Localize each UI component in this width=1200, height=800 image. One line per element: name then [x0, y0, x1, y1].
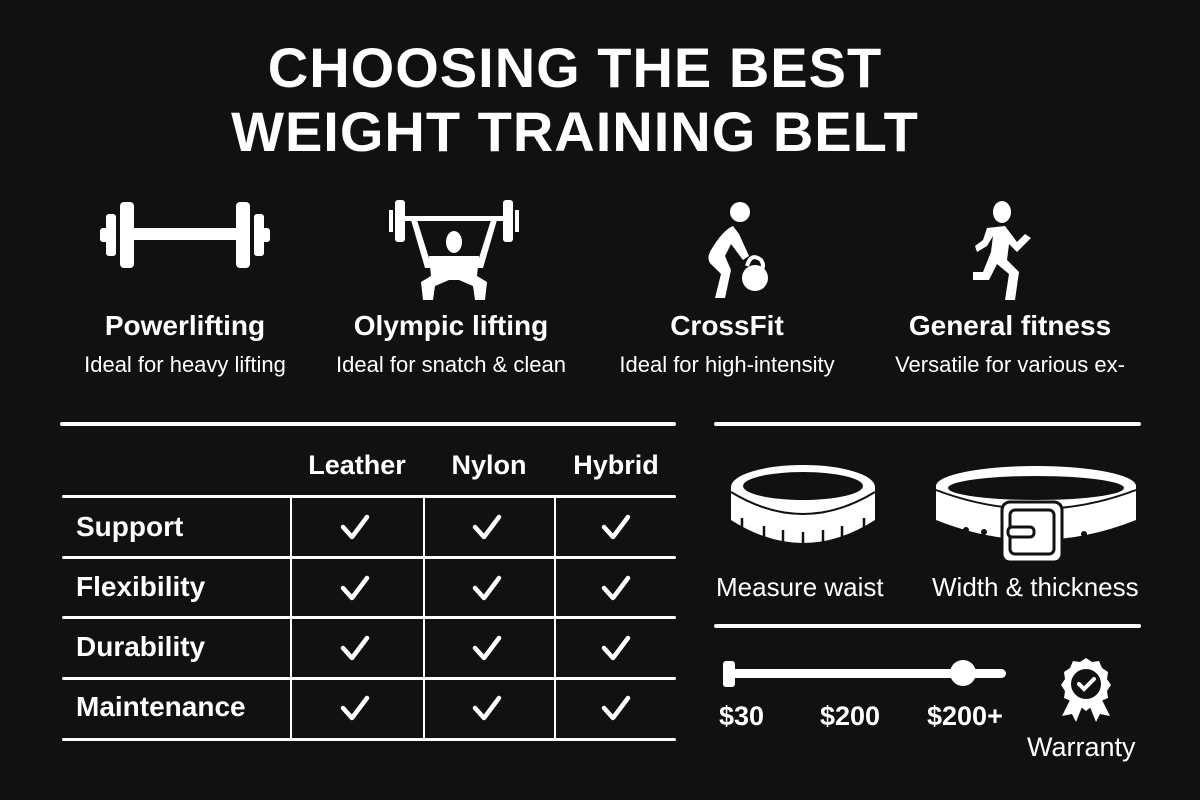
panel: price and warranty: $200+ [927, 701, 1003, 731]
icon: kettlebell swing [708, 202, 768, 298]
panel: price and warranty: $200 [820, 701, 880, 731]
row labels: Support [76, 511, 183, 542]
icon: runner [973, 201, 1031, 300]
title: WEIGHT TRAINING BELT [231, 100, 919, 163]
icon: overhead lifter [389, 200, 519, 300]
icon: warranty badge [1061, 658, 1111, 722]
panel: price and warranty: $30 [719, 701, 764, 731]
panel: general fitness [895, 201, 1125, 377]
panel: material comparison table: Hybrid [573, 450, 659, 480]
checkmarks [340, 514, 630, 720]
panel: crossfit [619, 202, 835, 377]
panel: general fitness: General fitness [909, 310, 1111, 341]
text: Flexibility [76, 571, 205, 602]
panel: olympic lifting [336, 200, 566, 377]
panel: powerlifting [84, 202, 286, 377]
panel: general fitness: Versatile for various ex- [895, 352, 1125, 377]
panel: powerlifting: Powerlifting [105, 310, 265, 341]
panel: olympic lifting: Ideal for snatch & clean [336, 352, 566, 377]
text: Durability [76, 631, 205, 662]
panel: sizing: Width & thickness [932, 572, 1139, 602]
panel: powerlifting: Ideal for heavy lifting [84, 352, 286, 377]
panel: crossfit: CrossFit [670, 310, 784, 341]
panel: sizing: Measure waist [716, 572, 884, 602]
title [231, 36, 919, 163]
icon: barbell [100, 202, 270, 268]
price slider [723, 660, 1006, 687]
text: Maintenance [76, 691, 246, 722]
title: CHOOSING THE BEST [268, 36, 882, 99]
panel: material comparison table: Nylon [451, 450, 526, 480]
panel: material comparison table [60, 422, 676, 741]
panel: crossfit: Ideal for high-intensity [619, 352, 835, 377]
panel: price and warranty [714, 624, 1141, 762]
panel: sizing [714, 422, 1141, 602]
icon: measuring tape [731, 465, 875, 543]
panel: material comparison table: Leather [308, 450, 406, 480]
icon: belt with buckle [936, 466, 1136, 560]
panel: olympic lifting: Olympic lifting [354, 310, 548, 341]
panel: price and warranty: Warranty [1027, 732, 1136, 762]
